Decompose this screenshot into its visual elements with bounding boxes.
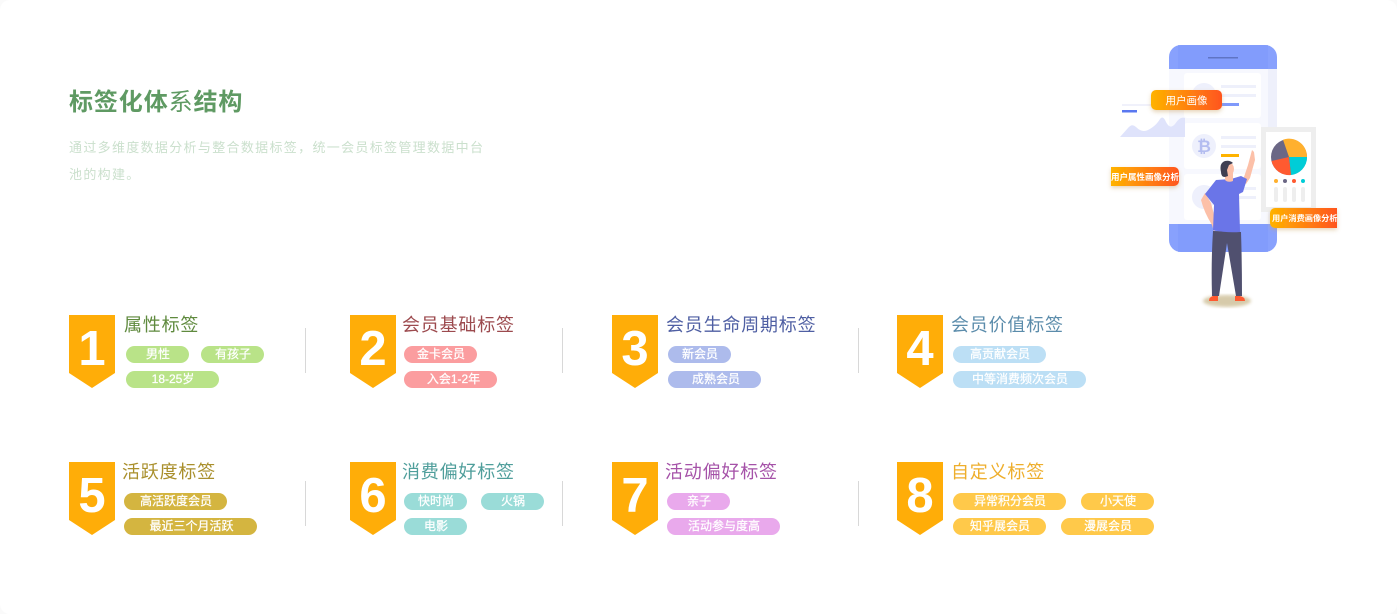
tag: 有孩子 <box>215 347 251 361</box>
tag <box>124 493 227 510</box>
area chart <box>1120 104 1185 137</box>
label: 用户消费画像分析: 用户消费画像分析 <box>1272 213 1338 223</box>
tag <box>953 371 1086 388</box>
phone: ₿ <box>1197 137 1211 156</box>
badge 4 <box>897 315 943 388</box>
tag: 亲子 <box>687 494 711 508</box>
tag: 高活跃度会员 <box>140 494 212 508</box>
tag <box>668 371 761 388</box>
tag <box>404 493 467 510</box>
tag: 入会1-2年 <box>427 372 480 386</box>
heading: 活动偏好标签 <box>665 462 778 482</box>
tag: 电影 <box>424 519 448 533</box>
phone <box>1169 45 1277 252</box>
tag: 成熟会员 <box>692 372 740 386</box>
tag <box>124 518 257 535</box>
heading: 会员价值标签 <box>951 315 1064 335</box>
panel: 属性标签 <box>69 315 264 388</box>
tag <box>481 493 544 510</box>
panel: 自定义标签 <box>897 462 1154 535</box>
badge 7 <box>612 462 658 535</box>
badge 1: 1 <box>78 322 106 376</box>
panel: 活动偏好标签 <box>612 462 780 535</box>
tag <box>404 518 467 535</box>
label: 用户属性画像分析 <box>1111 167 1180 186</box>
badge 1 <box>69 315 115 388</box>
badge 3 <box>612 315 658 388</box>
tag: 最近三个月活跃 <box>149 519 234 533</box>
badge 2: 2 <box>359 322 387 376</box>
chart panel with pie <box>1264 130 1314 210</box>
tag <box>1061 518 1154 535</box>
tag: 小天使 <box>1100 494 1136 508</box>
heading: 属性标签 <box>124 315 199 335</box>
badge 8: 8 <box>906 469 934 523</box>
heading: 自定义标签 <box>951 462 1045 482</box>
tag <box>126 346 189 363</box>
title: 标签化体系结构 <box>69 89 243 116</box>
panel: 会员价值标签 <box>897 315 1086 388</box>
label: 用户画像 <box>1151 90 1222 110</box>
person <box>1201 150 1255 307</box>
tag: 活动参与度高 <box>688 519 760 533</box>
description text: 通过多维度数据分析与整合数据标签，统一会员标签管理数据中台池的构建。 <box>69 140 484 182</box>
heading: 活跃度标签 <box>122 462 216 482</box>
badge 5 <box>69 462 115 535</box>
badge 4: 4 <box>906 322 934 376</box>
tag: 新会员 <box>682 347 718 361</box>
badge 7: 7 <box>621 469 649 523</box>
badge 5: 5 <box>78 469 106 523</box>
tag <box>953 518 1046 535</box>
illustration: phone with user profile <box>1108 45 1340 308</box>
badge 6 <box>350 462 396 535</box>
badge 8 <box>897 462 943 535</box>
heading: 消费偏好标签 <box>402 462 515 482</box>
tag: 18-25岁 <box>152 372 194 386</box>
tag: 男性 <box>146 347 170 361</box>
badge 2 <box>350 315 396 388</box>
tag: 金卡会员 <box>417 347 465 361</box>
badge 6: 6 <box>359 469 387 523</box>
tag <box>667 493 730 510</box>
label: 用户消费画像分析 <box>1270 208 1338 228</box>
tag <box>953 346 1046 363</box>
tag: 异常积分会员 <box>974 494 1046 508</box>
tag <box>953 493 1066 510</box>
tag: 中等消费频次会员 <box>972 372 1068 386</box>
tag: 火锅 <box>501 494 525 508</box>
tag <box>667 518 780 535</box>
panel: 活跃度标签 <box>69 462 257 535</box>
tag: 漫展会员 <box>1084 519 1132 533</box>
badge 3: 3 <box>621 322 649 376</box>
label: 用户属性画像分析: 用户属性画像分析 <box>1111 172 1180 182</box>
panel: 会员生命周期标签 <box>612 315 816 388</box>
tag <box>1081 493 1154 510</box>
tag: 高贡献会员 <box>970 347 1030 361</box>
tag <box>404 371 497 388</box>
tag <box>404 346 477 363</box>
tag <box>668 346 731 363</box>
panel: 消费偏好标签 <box>350 462 544 535</box>
heading: 会员生命周期标签 <box>666 315 816 335</box>
tag <box>126 371 219 388</box>
tag <box>201 346 264 363</box>
heading: 会员基础标签 <box>402 315 515 335</box>
panel: 会员基础标签 <box>350 315 515 388</box>
label: 用户画像: 用户画像 <box>1166 94 1208 107</box>
tag: 知乎展会员 <box>970 519 1030 533</box>
tag: 快时尚 <box>418 494 454 508</box>
